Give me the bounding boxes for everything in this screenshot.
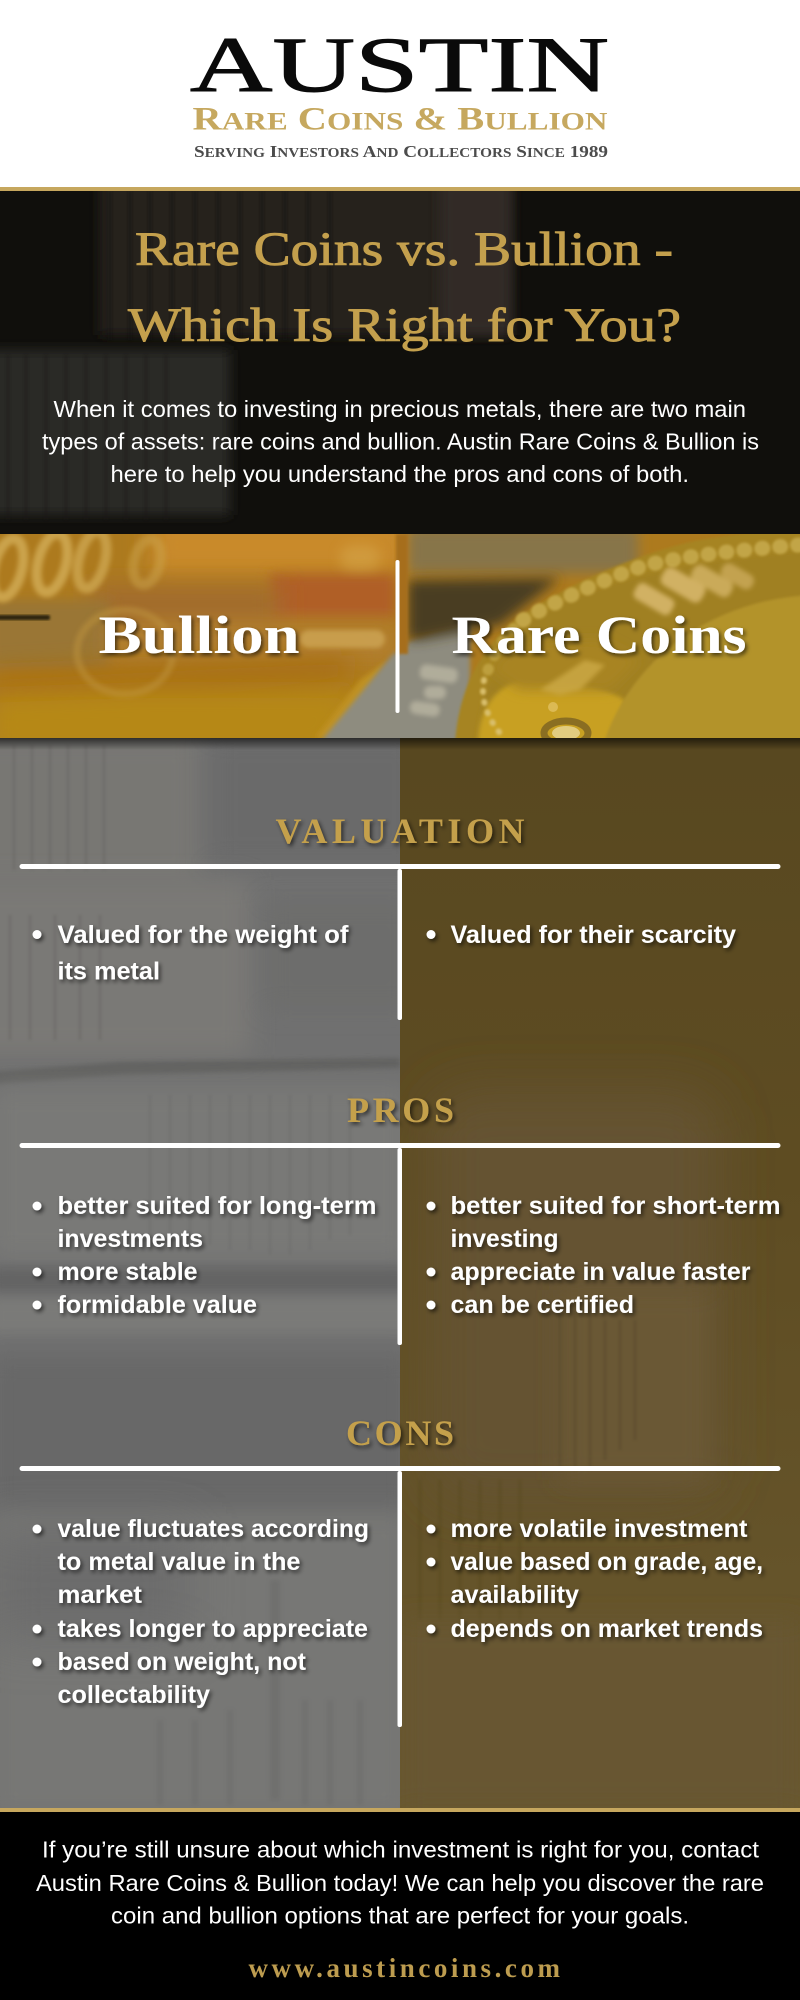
section: pros (20, 1090, 780, 1345)
footer call to action: If you’re still unsure about which investment is right for you, contact (42, 1836, 760, 1862)
list: rare coins pros (426, 1192, 780, 1319)
list: bullion pros: better suited for long-term (58, 1192, 376, 1220)
column divider: valuation (398, 869, 402, 1020)
list: rare coins pros: investing (450, 1225, 558, 1253)
list: bullion cons: based on weight, not (58, 1648, 307, 1676)
footer call to action: coin and bullion options that are perfect for your goals. (111, 1902, 689, 1928)
rule: valuation (20, 864, 780, 869)
rule: pros (20, 1143, 780, 1148)
list: bullion cons (32, 1515, 369, 1709)
header column divider (396, 560, 400, 713)
gold divider bottom (0, 1808, 800, 1812)
column divider: cons (398, 1471, 402, 1727)
logo: AUSTIN wordmark: AUSTIN (190, 22, 609, 109)
list: bullion valuation (32, 921, 349, 986)
footer panel (0, 1812, 800, 2000)
list: rare coins cons: value based on grade, age, (450, 1548, 763, 1576)
logo: Rare Coins & Bullion: RARE C OINS & B ULLION (192, 102, 608, 138)
heading: valuation: VALUATION (276, 811, 524, 851)
intro text block: types of assets: rare coins and bullion. Austin Rare Coins & Bullion is (42, 428, 759, 454)
list: rare coins pros: appreciate in value faster (450, 1258, 751, 1286)
panel: rare coins column background (400, 738, 800, 1810)
list: rare coins cons: more volatile investment (450, 1515, 748, 1543)
list: bullion cons: to metal value in the (58, 1548, 300, 1576)
photo: bar digits (0, 529, 165, 600)
list: bullion pros (32, 1192, 376, 1319)
intro text block: here to help you understand the pros and cons of both. (110, 461, 689, 487)
panel: gold photo band (0, 534, 800, 738)
title: Rare Coins vs. Bullion - (135, 223, 673, 276)
panel: intro dark background (0, 170, 800, 534)
list: bullion pros: more stable (58, 1258, 198, 1286)
footer call to action (36, 1836, 764, 1928)
footer website: www.austincoins.com (248, 1953, 560, 1983)
list: bullion valuation: its metal (58, 958, 160, 986)
list: bullion valuation: Valued for the weight of (58, 921, 349, 949)
list: rare coins cons: depends on market trends (450, 1615, 763, 1643)
heading: Bullion: Bullion (98, 605, 300, 665)
footer call to action: Austin Rare Coins & Bullion today! We can help you discover the rare (36, 1870, 764, 1896)
list: rare coins cons: availability (450, 1581, 579, 1609)
shadow under photo band (0, 738, 800, 750)
photo: right background silver coin (318, 528, 638, 745)
list: rare coins valuation: Valued for their scarcity (450, 921, 736, 949)
photo: gold coin (455, 528, 800, 745)
photo: gold bar left (0, 534, 400, 738)
gold divider top (0, 187, 800, 191)
list: rare coins pros: better suited for short-term (450, 1192, 780, 1220)
title (128, 223, 681, 352)
intro text block: When it comes to investing in precious metals, there are two main (54, 396, 746, 422)
heading: Rare Coins: Rare Coins (452, 605, 746, 665)
intro text block (42, 396, 759, 487)
logo: tagline: SERVING INVESTORS AND COLLECTORS SINCE 1989 (194, 142, 608, 161)
title: Which Is Right for You? (128, 299, 681, 352)
list: bullion cons: takes longer to appreciate (58, 1615, 368, 1643)
list: rare coins pros: can be certified (450, 1291, 634, 1319)
list: rare coins cons (426, 1515, 763, 1643)
panel: bullion column background (0, 735, 420, 1820)
list: bullion cons: value fluctuates according (58, 1515, 369, 1543)
list: bullion cons: collectability (58, 1681, 210, 1709)
header: logo panel (0, 0, 800, 187)
photo: coin beading (523, 544, 800, 620)
list: bullion pros: formidable value (58, 1291, 257, 1319)
rule: cons (20, 1466, 780, 1471)
heading: pros: PROS (347, 1090, 454, 1130)
list: bullion cons: market (58, 1581, 143, 1609)
section: valuation (20, 811, 780, 1020)
list: bullion pros: investments (58, 1225, 203, 1253)
column divider: pros (398, 1148, 402, 1345)
heading: cons: CONS (346, 1413, 454, 1453)
section: cons (20, 1413, 780, 1727)
